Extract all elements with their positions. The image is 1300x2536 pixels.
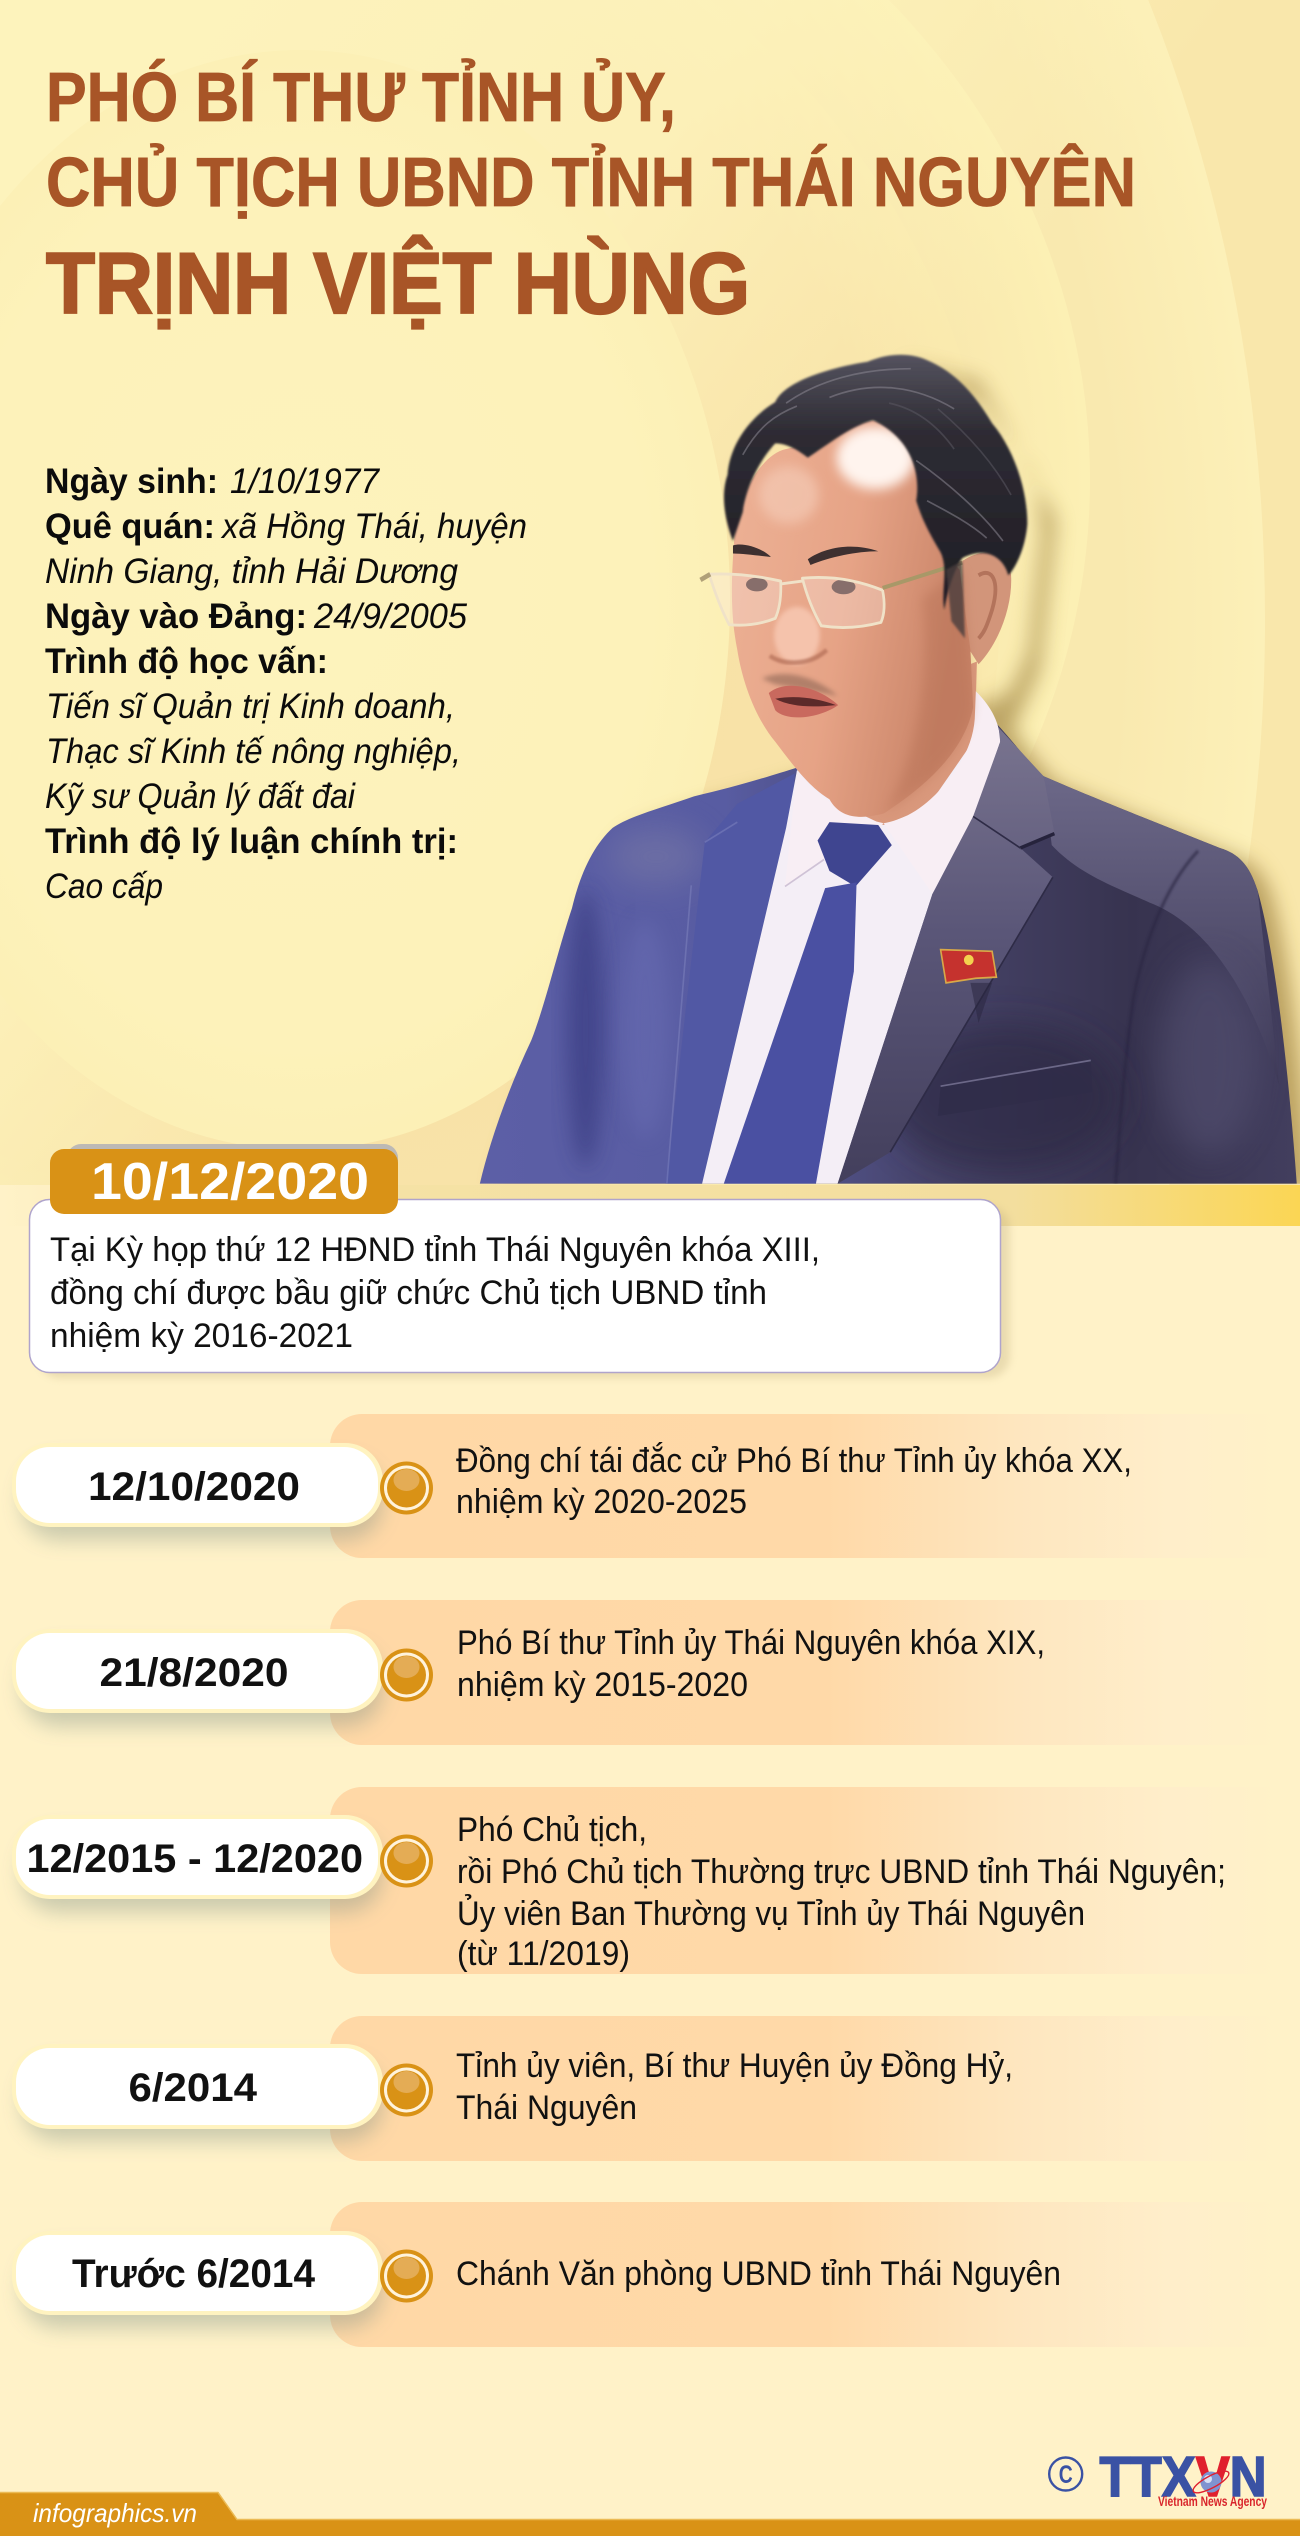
description text: Chánh Văn phòng UBND tỉnh Thái Nguyên [456, 2255, 1061, 2293]
personal information block: 1/10/1977 [230, 462, 380, 501]
date text: 21/8/2020 [100, 1651, 288, 1695]
timeline marker [380, 2250, 433, 2302]
description band [330, 1600, 1300, 1745]
description band [330, 1414, 1300, 1558]
description text: Ủy viên Ban Thường vụ Tỉnh ủy Thái Nguyên [457, 1895, 1085, 1933]
timeline row: 12/10/2020 [12, 1414, 1300, 1558]
description band [330, 2016, 1300, 2161]
hair highlights [743, 369, 1011, 541]
date tab [50, 1149, 398, 1214]
personal information block: Thạc sĩ Kinh tế nông nghiệp, [46, 732, 461, 771]
ear [962, 552, 1011, 664]
timeline row: Truoc 6/2014 [12, 2202, 1300, 2347]
personal information block: 24/9/2005 [313, 597, 468, 636]
date pill [12, 2044, 383, 2129]
sideburn [946, 561, 965, 638]
personal information block: Tiến sĩ Quản trị Kinh doanh, [46, 687, 455, 726]
source text: infographics.vn [33, 2498, 197, 2528]
description text: đồng chí được bầu giữ chức Chủ tịch UBND tỉnh [50, 1274, 767, 1312]
forehead highlight [837, 426, 915, 489]
date pill shadow [22, 1646, 382, 1726]
timeline marker [380, 2064, 433, 2116]
TTXVN wordmark: TTXVN [1100, 2445, 1266, 2508]
timeline row: 6/2014 [12, 2016, 1300, 2161]
title [46, 57, 1136, 332]
featured date panel 10/12/2020 [30, 1144, 1010, 1378]
timeline marker [380, 1834, 433, 1888]
date pill [12, 1815, 383, 1899]
description text: nhiệm kỳ 2016-2021 [50, 1317, 353, 1355]
copyright symbol [1049, 2458, 1082, 2490]
description text: rồi Phó Chủ tịch Thường trực UBND tỉnh Thái Nguyên; [457, 1853, 1226, 1891]
date pill shadow [22, 1832, 382, 1912]
description text: Đồng chí tái đắc cử Phó Bí thư Tỉnh ủy khóa XX, [456, 1442, 1132, 1480]
cheek shading [898, 588, 978, 796]
description text: Tại Kỳ họp thứ 12 HĐND tỉnh Thái Nguyên khóa XIII, [50, 1231, 820, 1269]
description text: Phó Bí thư Tỉnh ủy Thái Nguyên khóa XIX, [457, 1624, 1045, 1662]
gold strip under portrait [0, 1185, 1300, 1226]
header background with concentric arcs [0, 0, 1300, 1185]
eyebrows [733, 544, 878, 565]
timeline row: 12/2015 - 12/2020 [12, 1787, 1300, 1974]
grey tab backing [67, 1144, 398, 1194]
description band [330, 1787, 1300, 1974]
description text [457, 1811, 1226, 1973]
left jacket lapel [666, 773, 795, 1184]
description text: (từ 11/2019) [457, 1935, 630, 1973]
description text [50, 1231, 820, 1355]
description text: Phó Chủ tịch, [457, 1811, 647, 1849]
personal information block: Cao cấp [45, 867, 163, 906]
date text: 10/12/2020 [91, 1153, 369, 1211]
description text: Tỉnh ủy viên, Bí thư Huyện ủy Đồng Hỷ, [456, 2047, 1013, 2085]
eyes [746, 578, 768, 591]
necktie [818, 822, 892, 886]
personal information block [45, 462, 527, 906]
portrait drop shadow [495, 362, 1300, 1192]
jacket fabric shading [567, 828, 1258, 1172]
date pill shadow [22, 2061, 382, 2141]
personal information block: Trình độ lý luận chính trị: [45, 822, 458, 861]
date text: Trước 6/2014 [72, 2252, 316, 2296]
jacket right shoulder [1044, 776, 1270, 1012]
mouth [769, 686, 838, 717]
shirt collar [785, 691, 1000, 894]
date pill [12, 1443, 383, 1527]
title: CHỦ TỊCH UBND TỈNH THÁI NGUYÊN [46, 142, 1136, 221]
description text: Thái Nguyên [456, 2089, 637, 2127]
personal information block: Kỹ sư Quản lý đất đai [45, 777, 356, 816]
personal information block: Quê quán: [45, 507, 215, 546]
title: TRỊNH VIỆT HÙNG [46, 236, 750, 332]
date pill shadow [22, 2248, 382, 2328]
footer bar with source tab [0, 2492, 1300, 2536]
portrait of Trinh Viet Hung [480, 355, 1300, 1192]
title: PHÓ BÍ THƯ TỈNH ỦY, [46, 57, 676, 136]
personal information block: Ngày sinh: [45, 462, 218, 501]
description text [456, 2047, 1013, 2127]
description text: nhiệm kỳ 2020-2025 [456, 1483, 747, 1521]
face [732, 420, 973, 817]
hair [724, 355, 1027, 610]
eyeglasses [700, 563, 962, 628]
description text: nhiệm kỳ 2015-2020 [457, 1666, 748, 1704]
right jacket lapel [838, 727, 1054, 1184]
breast pocket [938, 1060, 1092, 1116]
personal information block: Ngày vào Đảng: [45, 597, 307, 636]
personal information block: Trình độ học vấn: [45, 642, 328, 681]
neck [828, 662, 977, 825]
timeline marker [380, 1648, 433, 1702]
date pill shadow [22, 1460, 382, 1540]
timeline marker [380, 1462, 433, 1514]
personal information block: Ninh Giang, tỉnh Hải Dương [45, 552, 459, 591]
date text: 6/2014 [128, 2066, 258, 2110]
TTXVN logo [1049, 2445, 1267, 2509]
date text: 12/2015 - 12/2020 [26, 1837, 363, 1881]
copyright symbol: C [1059, 2461, 1073, 2489]
globe with orbit [1191, 2467, 1231, 2497]
description text [457, 1624, 1045, 1704]
date pill [12, 1629, 383, 1713]
timeline row: 21/8/2020 [12, 1600, 1300, 1745]
date text: 12/10/2020 [88, 1465, 300, 1509]
delegate pin [941, 950, 996, 1023]
description band [330, 2202, 1300, 2347]
description text [456, 1442, 1132, 1521]
date pill [12, 2231, 383, 2315]
jacket [480, 722, 1297, 1184]
agency name: Vietnam News Agency [1158, 2494, 1267, 2509]
white text box [30, 1200, 1000, 1372]
shirt [702, 693, 1000, 1184]
personal information block: xã Hồng Thái, huyện [220, 507, 527, 546]
mustache shadow [762, 674, 838, 696]
panel shadow [38, 1206, 1010, 1378]
